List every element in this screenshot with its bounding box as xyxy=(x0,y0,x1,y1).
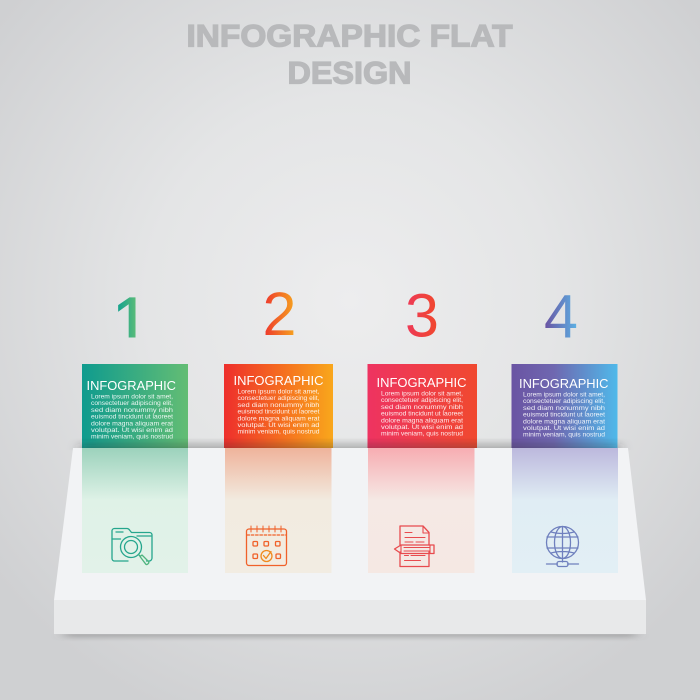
step numbers: 2 xyxy=(262,280,296,348)
shadow behind platform xyxy=(80,438,620,450)
card 4: volutpat. Ut wisi enim ad xyxy=(523,425,605,432)
card 2: dolore magna aliquam erat xyxy=(238,415,320,422)
card 3: volutpat. Ut wisi enim ad xyxy=(381,424,463,431)
card 3: dolore magna aliquam erat xyxy=(381,417,463,424)
lower panel 3 xyxy=(368,448,474,573)
card 3: consectetuer adipiscing elit, xyxy=(381,397,463,404)
card 2: Lorem ipsum dolor sit amet, xyxy=(238,388,320,396)
lower panel 1 xyxy=(82,448,188,573)
card 1: minim veniam, quis nostrud xyxy=(91,434,173,441)
step numbers xyxy=(118,292,576,338)
card 1: INFOGRAPHIC xyxy=(86,378,176,393)
card 2: INFOGRAPHIC xyxy=(234,373,324,388)
card 4: sed diam nonummy nibh xyxy=(523,405,605,412)
card 1: sed diam nonummy nibh xyxy=(91,407,173,414)
icon: document and pencil xyxy=(394,526,434,566)
icon: calendar with check xyxy=(246,526,286,566)
card 2 xyxy=(224,364,333,449)
card 1: dolore magna aliquam erat xyxy=(91,420,173,427)
card 3: Lorem ipsum dolor sit amet, xyxy=(381,390,463,398)
card 4: minim veniam, quis nostrud xyxy=(523,432,605,439)
card 2: euismod tincidunt ut laoreet xyxy=(238,409,320,416)
card 1: volutpat. Ut wisi enim ad xyxy=(91,427,173,434)
card 4: Lorem ipsum dolor sit amet, xyxy=(523,392,605,398)
title: DESIGN xyxy=(288,54,412,90)
card 1 xyxy=(82,364,188,449)
card 1: euismod tincidunt ut laoreet xyxy=(91,414,173,421)
card 3 xyxy=(368,364,477,449)
lower panel 4 xyxy=(512,448,618,573)
card 2: volutpat. Ut wisi enim ad xyxy=(238,422,320,429)
card 1: consectetuer adipiscing elit, xyxy=(91,400,173,407)
icon: folder with magnifier xyxy=(112,528,152,564)
card 3: minim veniam, quis nostrud xyxy=(381,431,463,438)
title xyxy=(186,18,512,90)
shadow below platform xyxy=(64,634,636,641)
lower panel 2 xyxy=(225,448,332,573)
card 1: Lorem ipsum dolor sit amet, xyxy=(91,394,173,400)
step numbers: 3 xyxy=(405,282,439,350)
step numbers: 1 xyxy=(112,284,150,360)
card 4 xyxy=(512,364,618,449)
card 4: dolore magna aliquam erat xyxy=(523,418,605,425)
card 2: consectetuer adipiscing elit, xyxy=(238,395,320,402)
card 3: sed diam nonummy nibh xyxy=(381,404,463,411)
card 3: euismod tincidunt ut laoreet xyxy=(381,411,463,418)
card 2: minim veniam, quis nostrud xyxy=(238,429,320,436)
platform xyxy=(54,448,646,634)
step numbers: 4 xyxy=(544,282,578,350)
card 4: consectetuer adipiscing elit, xyxy=(523,398,605,405)
card 2: sed diam nonummy nibh xyxy=(238,402,320,409)
card 4: euismod tincidunt ut laoreet xyxy=(523,412,605,419)
card 3: INFOGRAPHIC xyxy=(376,375,466,390)
card 4: INFOGRAPHIC xyxy=(519,376,608,391)
icon: globe network xyxy=(546,526,578,566)
title: INFOGRAPHIC FLAT xyxy=(186,18,512,54)
